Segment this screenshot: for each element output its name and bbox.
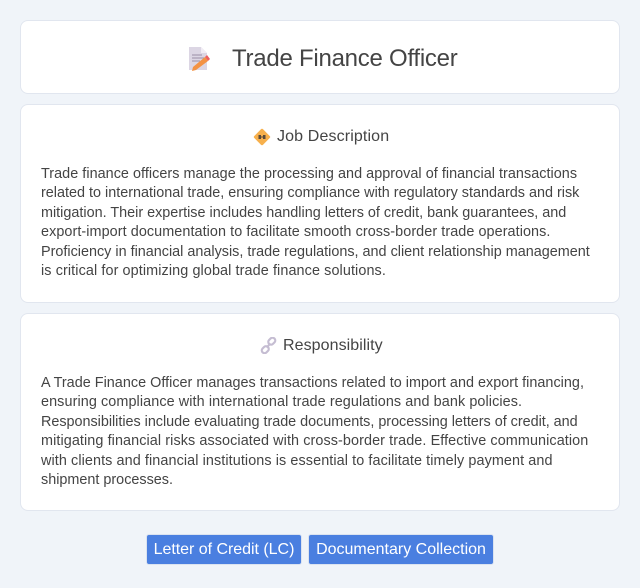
text: with clients and financial institutions is essential to facilitate timely payment and [41,453,553,469]
panel: job description [20,104,620,303]
panel: title [20,20,620,94]
text: job description [41,166,590,279]
button: letter of credit [146,534,302,565]
text: Trade finance officers manage the processing and approval of financial transactions [41,166,577,182]
button: documentary collection [308,534,494,565]
text: shipment processes. [41,472,173,488]
text: mitigating financial risks associated with cross-border trade. Effective communication [41,433,588,449]
text: is critical for optimizing global trade finance solutions. [41,263,386,279]
text: Responsibilities include evaluating trade documents, processing letters of credit, and [41,414,578,430]
text: ensuring compliance with international trade regulations and bank policies. [41,394,522,410]
icon: chain link [260,337,276,354]
text: A Trade Finance Officer manages transactions related to import and export financing, [41,375,584,391]
title: Trade Finance Officer [232,45,458,72]
text: responsibility [41,375,588,488]
text: export-import documentation to facilitate smooth cross-border trade operations. [41,224,550,240]
panel: responsibility [20,313,620,511]
button: letter of credit: Letter of Credit (LC) [154,541,294,558]
icon: job description diamond [254,128,270,146]
text: mitigation. Their expertise includes handling letters of credit, bank guarantees, and [41,205,566,221]
icon: document with pencil [189,47,210,71]
button: documentary collection: Documentary Collection [316,541,486,558]
heading: responsibility: Responsibility [283,337,383,354]
text: Proficiency in financial analysis, trade regulations, and client relationship management [41,244,590,260]
text: related to international trade, ensuring compliance with regulatory standards and risk [41,185,579,201]
heading: job description: Job Description [277,128,389,145]
